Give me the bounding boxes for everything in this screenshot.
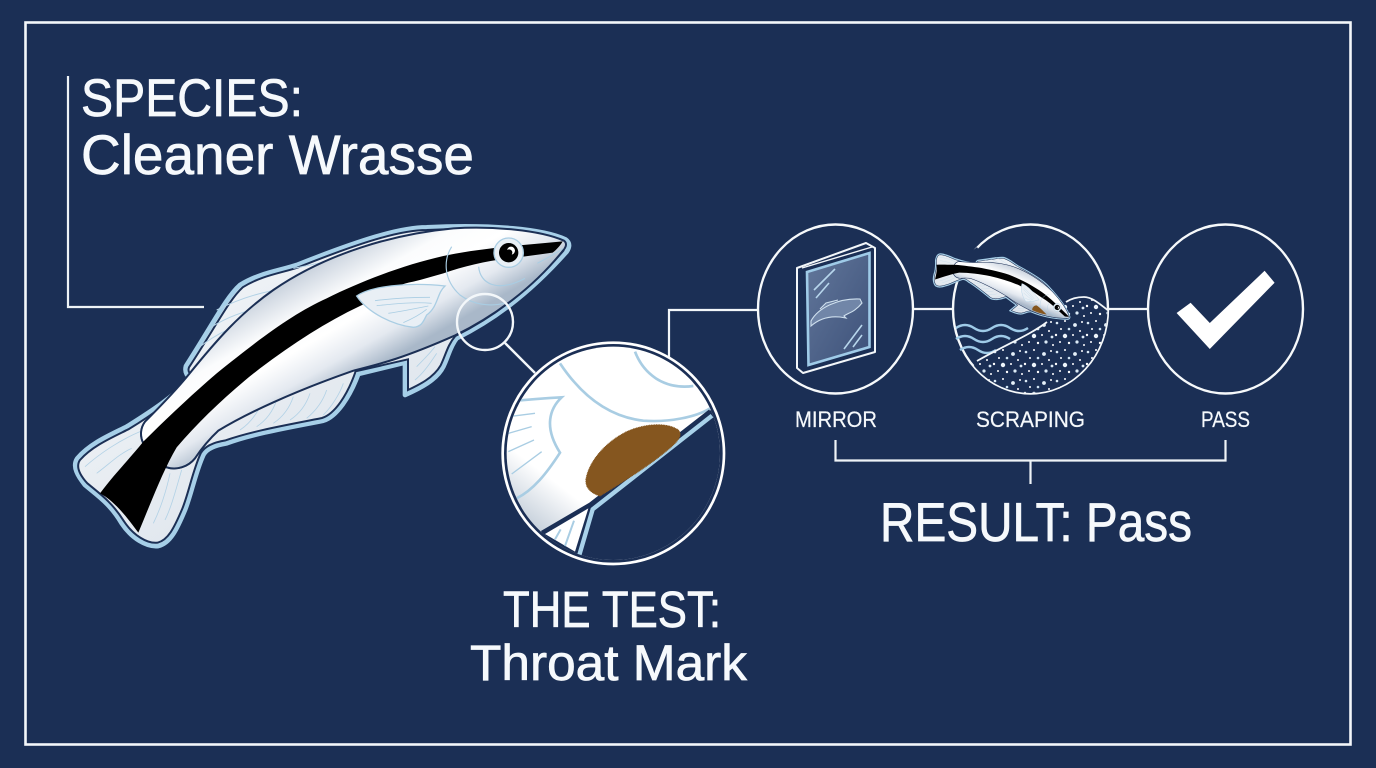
connector scraping to pass [1108, 308, 1148, 310]
heading: the test [470, 581, 748, 691]
magnified throat mark circle [501, 341, 726, 566]
step labels: PASS [1201, 407, 1250, 432]
step labels [795, 407, 1250, 432]
species leader line [68, 76, 204, 307]
body edge [542, 411, 710, 532]
ventral fin [545, 508, 588, 552]
heading: the test: Throat Mark [470, 635, 748, 691]
connector to magnified view [505, 343, 535, 373]
navy area outside body [542, 410, 720, 560]
step labels: MIRROR [795, 407, 877, 432]
heading: result: RESULT: Pass [880, 491, 1192, 553]
step labels: SCRAPING [976, 407, 1085, 432]
waves [956, 325, 1028, 353]
mirror reflection fish [811, 299, 862, 326]
throat zoom marker [457, 294, 513, 350]
fin rays [508, 413, 542, 474]
gill curves [560, 352, 710, 421]
icon: check mark [1177, 271, 1275, 349]
heading: species: SPECIES: [81, 69, 303, 128]
heading: the test: THE TEST: [503, 581, 721, 638]
light blue edge [579, 416, 712, 555]
step circle: pass [1148, 224, 1303, 394]
illustration: cleaner wrasse fish [75, 226, 569, 546]
ventral fin rays [555, 521, 574, 546]
sandy seabed [974, 296, 1108, 393]
connector mirror to scraping [913, 308, 953, 310]
connector to test steps [669, 310, 758, 358]
gap behind fish [954, 250, 979, 281]
fin edge [507, 397, 562, 498]
heading: species [81, 69, 474, 186]
step circle: scraping [932, 223, 1110, 395]
step circle: mirror [758, 224, 913, 394]
heading: species: Cleaner Wrasse [81, 123, 474, 186]
brown mark [586, 425, 680, 496]
icon: mirror [797, 243, 875, 373]
small fish scraping [921, 213, 1073, 371]
result bracket [836, 440, 1226, 484]
